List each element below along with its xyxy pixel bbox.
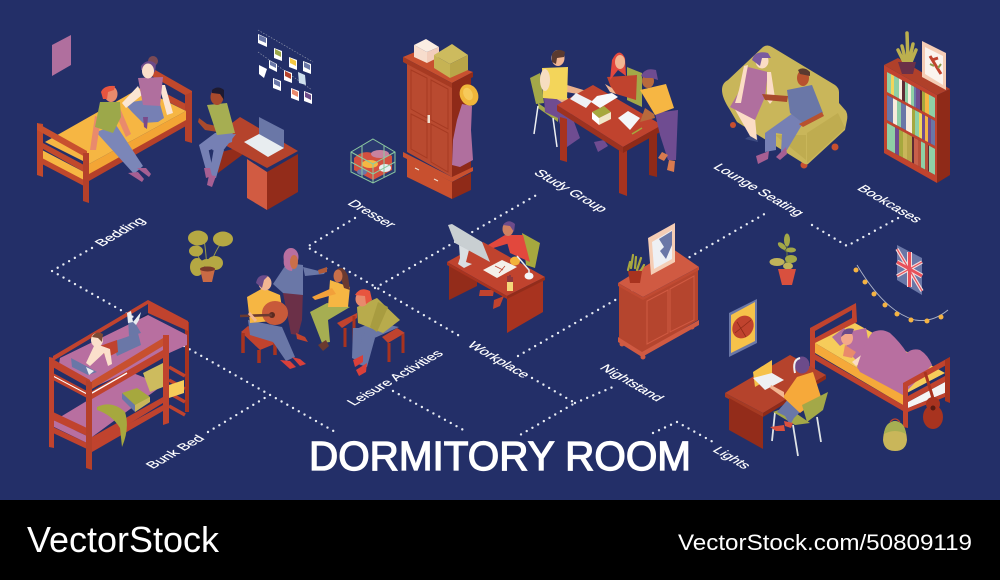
paper lamp and pencil cup xyxy=(483,256,534,291)
ladder xyxy=(169,367,185,415)
person: man on sofa xyxy=(756,68,824,164)
person: man at desk xyxy=(198,88,236,187)
illustration: leisure activities group xyxy=(240,248,405,376)
label: Lounge Seating: Lounge Seating xyxy=(710,162,808,218)
footer watermark band xyxy=(0,500,1000,580)
guitar xyxy=(923,372,943,429)
plant: potted rubber plant xyxy=(770,234,797,285)
stool left xyxy=(241,326,277,363)
boxes on wardrobe xyxy=(414,39,468,78)
chair and person: red-haired woman xyxy=(594,52,642,152)
poster: basketball xyxy=(728,299,758,357)
hanging dress and hat xyxy=(452,81,482,167)
picture on nightstand xyxy=(648,223,675,275)
illustration: lounge seating sofa xyxy=(722,46,847,168)
illustration: workplace desk xyxy=(447,221,545,333)
chair xyxy=(772,407,821,456)
dotted connector lines xyxy=(52,193,900,442)
person: seated woman xyxy=(310,268,357,351)
icon: backpack xyxy=(883,419,907,451)
label: Dresser: Dresser xyxy=(344,198,400,230)
label: Nightstand: Nightstand xyxy=(596,362,667,403)
monitor xyxy=(448,224,490,268)
label: Bunk Bed: Bunk Bed xyxy=(142,433,208,471)
person at workplace xyxy=(488,221,540,268)
illustration: nightstand xyxy=(618,223,699,360)
illustration: bunk bed xyxy=(49,300,189,470)
person xyxy=(770,356,821,431)
label: Bookcases: Bookcases xyxy=(854,183,926,225)
person: woman on bed xyxy=(122,56,173,129)
laptop xyxy=(753,360,784,390)
flag: union jack xyxy=(897,245,922,295)
chair and person: man in yellow xyxy=(530,50,590,147)
brand name: VectorStock xyxy=(27,519,220,560)
posts and rails xyxy=(49,335,169,470)
label: Bedding: Bedding xyxy=(92,215,149,248)
blanket and sleeper xyxy=(832,328,932,395)
plant on nightstand xyxy=(628,255,644,283)
shelf 1 books xyxy=(887,72,935,118)
icon: laundry basket xyxy=(351,139,395,183)
shelf 2 books xyxy=(887,95,935,146)
illustration: sleeping student bed xyxy=(810,303,950,429)
person: woman leaning over table xyxy=(640,69,678,172)
image url: VectorStock.com/50809119 xyxy=(678,530,972,555)
illustration: bedding bed with students xyxy=(37,56,298,210)
illustration: study group table xyxy=(530,50,678,196)
title: DORMITORY ROOM xyxy=(309,433,691,479)
poster: pink wall art xyxy=(52,35,71,76)
label: Workplace: Workplace xyxy=(464,340,534,380)
desk with laptop xyxy=(212,117,298,210)
person: standing woman xyxy=(273,248,328,342)
illustration: bookcase xyxy=(884,33,950,183)
person: man on bed xyxy=(90,86,151,182)
plant: monstera xyxy=(188,230,233,282)
label: Leisure Activities: Leisure Activities xyxy=(344,348,447,408)
person lying on top bunk xyxy=(71,311,141,375)
shelf 3 books xyxy=(887,123,935,175)
plant on bookcase xyxy=(898,33,916,74)
label: Study Group: Study Group xyxy=(530,168,612,214)
papers and books xyxy=(570,93,642,134)
picture frame xyxy=(922,41,946,90)
footboard xyxy=(903,357,950,428)
label: Lights: Lights xyxy=(709,445,755,471)
illustration: wardrobe dresser xyxy=(403,39,482,199)
person: man right on stool xyxy=(352,289,405,376)
illustration: student with headphones at desk xyxy=(725,355,828,456)
person: man with guitar xyxy=(240,275,306,369)
person: woman on sofa xyxy=(730,52,775,142)
photo string wall decoration xyxy=(258,30,313,104)
towel and folded books xyxy=(97,388,150,447)
string lights xyxy=(854,265,948,324)
